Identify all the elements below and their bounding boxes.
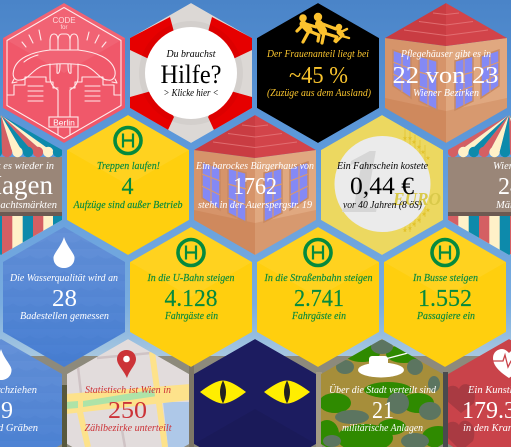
- hexagon: nursing homes, house: [385, 3, 507, 143]
- text: 4 elevators: [73, 161, 182, 211]
- text: 4.128: In die U-Bahn steigen: [147, 273, 234, 284]
- text: 2.741: Fahrgäste ein: [291, 311, 346, 322]
- icon: bus stop H: [305, 240, 331, 266]
- text: Christmas markets: [0, 161, 57, 211]
- text: 21 military sites: 21: [372, 398, 394, 424]
- text: 28 bathing spots: [9, 273, 118, 322]
- hexagon: Code for Berlin logo: [3, 3, 125, 143]
- text: 28 bathing spots: 28: [52, 286, 77, 312]
- text: 4 elevators: Aufzüge sind außer Betrieb: [73, 200, 182, 211]
- illustration: market stall: [0, 115, 63, 255]
- text: 45 percent: ~45 %: [289, 63, 348, 89]
- illustration: euro coin: [334, 128, 441, 234]
- hexagon: market stall left: [0, 115, 63, 255]
- text: 1.552: In Busse steigen: [412, 273, 478, 284]
- illustration: water with drop: [0, 339, 62, 447]
- text: 1.552: [412, 273, 478, 322]
- text: 250 districts: Zählbezirke unterteilt: [84, 423, 173, 434]
- text: 4.128: Fahrgäste ein: [164, 311, 218, 322]
- illustration: euro coin: ★: [425, 207, 431, 214]
- illustration: water with drop: [3, 227, 125, 367]
- text: 45 percent: Der Frauenanteil liegt bei: [266, 49, 369, 60]
- text: 1.552: Passagiere ein: [416, 311, 475, 322]
- hexagon: tram passengers: [257, 227, 379, 367]
- text: 0,44 euro: [336, 161, 428, 211]
- illustration: house: [194, 115, 316, 255]
- illustration: euro coin: ★: [411, 139, 417, 146]
- icon: right cat eye: [264, 380, 310, 404]
- hexagon: women share among immigrants: [257, 3, 379, 143]
- hexagon: stairs, elevators: [67, 115, 189, 255]
- text: 0,44 euro: 0,44 €: [350, 173, 415, 200]
- hexagon: bus passengers: [384, 227, 506, 367]
- text: 2.741: In die Straßenbahn steigen: [264, 273, 373, 284]
- icon: tank: [358, 353, 408, 378]
- text: 0,44 euro: Ein Fahrschein kostete: [336, 161, 428, 172]
- illustration: market stall: [448, 115, 511, 255]
- hexagon: water, ditches: [0, 339, 62, 447]
- hexagon: market stall right: [448, 115, 511, 255]
- illustration: euro coin: ★: [421, 211, 427, 218]
- hexagon: ticket price, euro coin: [321, 115, 443, 255]
- icon: bus stop H: [115, 128, 141, 154]
- hexagon: baroque house: [194, 115, 316, 255]
- text: Hilfe: Du brauchst: [166, 49, 217, 60]
- logo wordmark: CODE: [52, 16, 76, 25]
- text: 28 bathing spots: Die Wasserqualität wird an: [9, 273, 118, 284]
- hexagon: map, districts: [66, 339, 190, 447]
- text: 22 von 23: 22 von 23: [392, 63, 498, 89]
- text: 1762: [195, 161, 314, 211]
- illustration: euro coin: 1: [340, 130, 386, 232]
- illustration: euro coin: ★: [402, 227, 408, 234]
- illustration: euro coin: ★: [425, 155, 431, 162]
- text: 45 percent: [266, 49, 371, 99]
- hexagon: artificial heart, hospitals: [445, 339, 511, 447]
- text: 250 districts: Statistisch ist Wien in: [85, 385, 171, 396]
- logo wordmark: [52, 16, 76, 128]
- illustration: house: [385, 3, 507, 143]
- text: 22 von 23: Wiener Bezirken: [413, 88, 479, 99]
- text: 4.128: 4.128: [164, 286, 218, 312]
- text: 250 districts: 250: [108, 398, 147, 424]
- text: 1762: 1762: [233, 174, 277, 200]
- text: Hilfe: > Klicke hier <: [164, 88, 218, 99]
- text: artificial heart: [462, 385, 511, 434]
- text: 45 percent: (Zuzüge aus dem Ausland): [267, 88, 371, 99]
- lifebuoy centre: [145, 27, 237, 119]
- hexagon: cat eyes: [194, 339, 316, 447]
- text: 1762: steht in der Auerspergstr. 19: [198, 200, 313, 211]
- icon: running family: [297, 13, 349, 43]
- hexagon: subway passengers: [130, 227, 252, 367]
- icon: white heart with pulse: [493, 349, 511, 378]
- text: 28 bathing spots: Badestellen gemessen: [20, 311, 109, 322]
- hexagon: military sites, camouflage: [315, 339, 454, 447]
- logo line art: sausage and fork: [7, 8, 121, 138]
- logo wordmark: Berlin: [53, 118, 75, 128]
- illustration: euro coin: ★: [411, 221, 417, 228]
- text: 2.741: [264, 273, 372, 322]
- text: Hilfe: [161, 50, 220, 96]
- illustration: euro coin: ★: [416, 144, 422, 151]
- text: 4.128: [147, 273, 234, 322]
- pattern: dark hearts: [445, 384, 475, 447]
- illustration: euro coin: EURO: [392, 189, 441, 209]
- text: 22 von 23: [392, 49, 498, 99]
- text: Hilfe: Hilfe?: [160, 60, 222, 89]
- text: 250 districts: [84, 385, 173, 434]
- logo wordmark: for: [60, 25, 68, 31]
- icon: bus stop H: [432, 240, 458, 266]
- illustration: euro coin: ★: [420, 149, 426, 156]
- text: 22 von 23: Pflegehäuser gibt es in: [400, 49, 491, 60]
- camouflage pattern: [315, 340, 454, 447]
- text: 21 military sites: militärische Anlagen: [342, 423, 423, 434]
- illustration: euro coin: ★: [407, 225, 413, 232]
- illustration: city map: [66, 352, 190, 447]
- text: 2.741: 2.741: [294, 286, 344, 312]
- icon: map pin: [117, 350, 136, 378]
- text: 1.552: 1.552: [418, 286, 472, 312]
- icon: bus stop H: [178, 240, 204, 266]
- illustration: euro coin: ★: [407, 135, 413, 142]
- text: markets: [494, 162, 511, 208]
- text: 21 military sites: [329, 384, 437, 434]
- text: ditches: [0, 385, 38, 434]
- text: 1762: Ein barockes Bürgerhaus von: [195, 161, 314, 172]
- illustration: euro coin: ★: [416, 217, 422, 224]
- hexagon: lifebuoy help: [130, 3, 252, 143]
- text: 0,44 euro: vor 40 Jahren (8 öS): [343, 200, 422, 211]
- icon: left cat eye: [200, 380, 246, 404]
- lifebuoy red segments: [130, 17, 252, 130]
- illustration: euro coin: ★: [402, 135, 408, 142]
- hexagon: water quality: [3, 227, 125, 367]
- background: city photo: [0, 356, 511, 447]
- text: 21 military sites: Über die Stadt verteilt sind: [329, 384, 437, 396]
- text: 4 elevators: 4: [122, 174, 134, 200]
- text: 4 elevators: Treppen laufen!: [97, 161, 160, 172]
